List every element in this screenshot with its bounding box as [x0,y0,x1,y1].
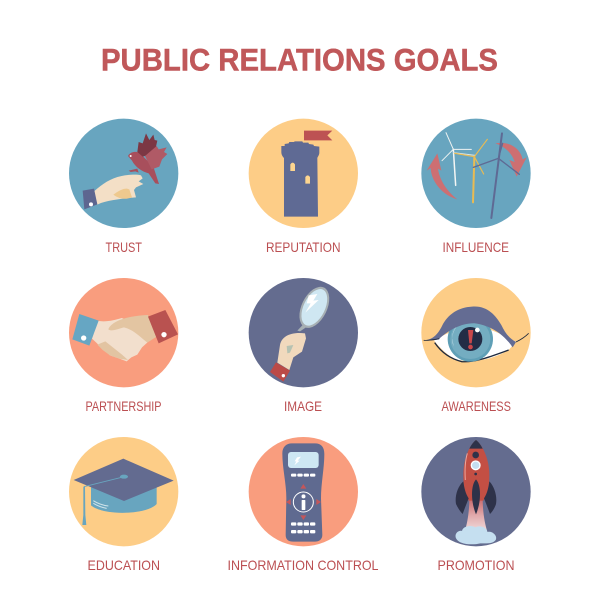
panel: education [69,437,178,573]
icon: wind turbines with arrows [421,119,531,228]
panel: image [249,278,358,414]
panel: influence [421,119,531,255]
label: promotion: PROMOTION [438,557,514,573]
panel: information control [228,437,379,573]
label: partnership: PARTNERSHIP [86,398,162,414]
label: influence: INFLUENCE [442,239,509,255]
label: trust: TRUST [106,239,142,255]
panel: reputation [249,119,358,255]
title: PUBLIC RELATIONS GOALS [101,42,498,78]
panel: awareness [421,278,531,414]
icon: graduation cap [69,437,178,546]
label: education: EDUCATION [88,557,160,573]
icon: hand holding mirror [249,278,358,387]
label: image: IMAGE [284,398,322,414]
icon: rocket [421,437,531,546]
label: awareness: AWARENESS [442,398,511,414]
label: reputation: REPUTATION [266,239,340,255]
icon: hand releasing bird [69,119,178,228]
icon: eye with exclamation mark [421,278,531,387]
icon: tower with flag [249,119,358,228]
icon: remote control [249,437,358,546]
icon: handshake [69,278,178,387]
label: information control: INFORMATION CONTROL [228,557,379,573]
panel: partnership [69,278,178,414]
panel: promotion [421,437,531,573]
panel: trust [69,119,178,255]
